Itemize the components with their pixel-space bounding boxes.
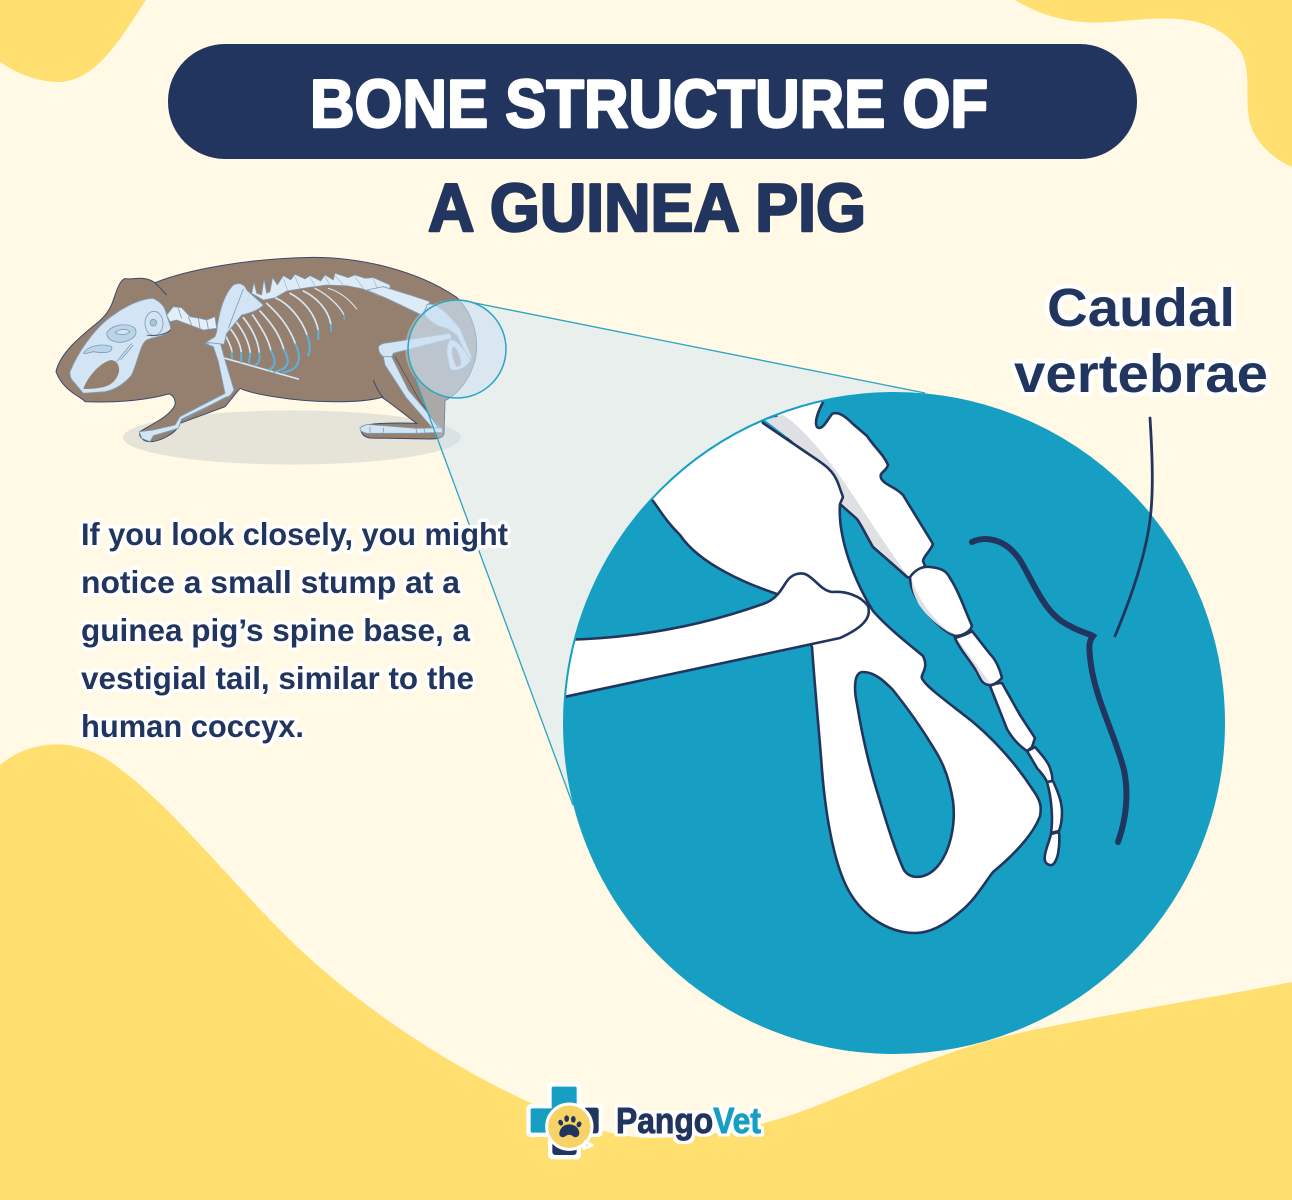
caudal vertebrae [910, 567, 972, 636]
teal disc [564, 393, 1224, 1053]
background blob: bottom [0, 744, 1292, 1200]
description text: human coccyx. [81, 708, 304, 744]
cross teal [531, 1087, 598, 1133]
description text: If you look closely, you might [81, 516, 508, 552]
gray band [765, 415, 908, 576]
logo [531, 1087, 761, 1155]
sacral spine [775, 402, 934, 579]
caudal vertebrae label: vertebrae [1014, 344, 1268, 404]
ribs and spine [206, 273, 390, 379]
description text: vestigial tail, similar to the [81, 660, 474, 696]
speech bubble [547, 1104, 592, 1149]
disc rim [564, 393, 1224, 1053]
femur [550, 573, 869, 700]
logo icon [531, 1087, 599, 1155]
ground shadow [123, 410, 461, 464]
title line 2: A GUINEA PIG [428, 170, 866, 246]
pelvis with hole [651, 421, 1042, 934]
beam edge lines [415, 300, 925, 805]
skull and forelimb [70, 298, 234, 442]
background blob: top left [0, 0, 146, 82]
guinea pig illustration [56, 257, 477, 464]
hind limb and pelvis [360, 287, 472, 433]
paw [557, 1115, 582, 1137]
description text [81, 516, 508, 744]
description text: guinea pig’s spine base, a [81, 612, 470, 648]
description text: notice a small stump at a [81, 564, 460, 600]
scapula [206, 284, 263, 344]
zoom beam [405, 300, 925, 805]
zoomed bone circle [550, 360, 1224, 1053]
logo wordmark: PangoVet [616, 1100, 761, 1141]
title line 1: BONE STRUCTURE OF [310, 66, 988, 142]
spine [252, 273, 390, 300]
caudal vertebrae label [1014, 278, 1268, 404]
background blob: top right [1015, 0, 1292, 167]
body silhouette [56, 257, 477, 442]
logo outline [531, 1087, 598, 1155]
cross navy [552, 1108, 599, 1155]
title banner [168, 44, 1137, 159]
bracket and leader line [972, 418, 1152, 842]
magnifier circle [408, 300, 506, 398]
caudal vertebrae label: Caudal [1047, 278, 1235, 338]
